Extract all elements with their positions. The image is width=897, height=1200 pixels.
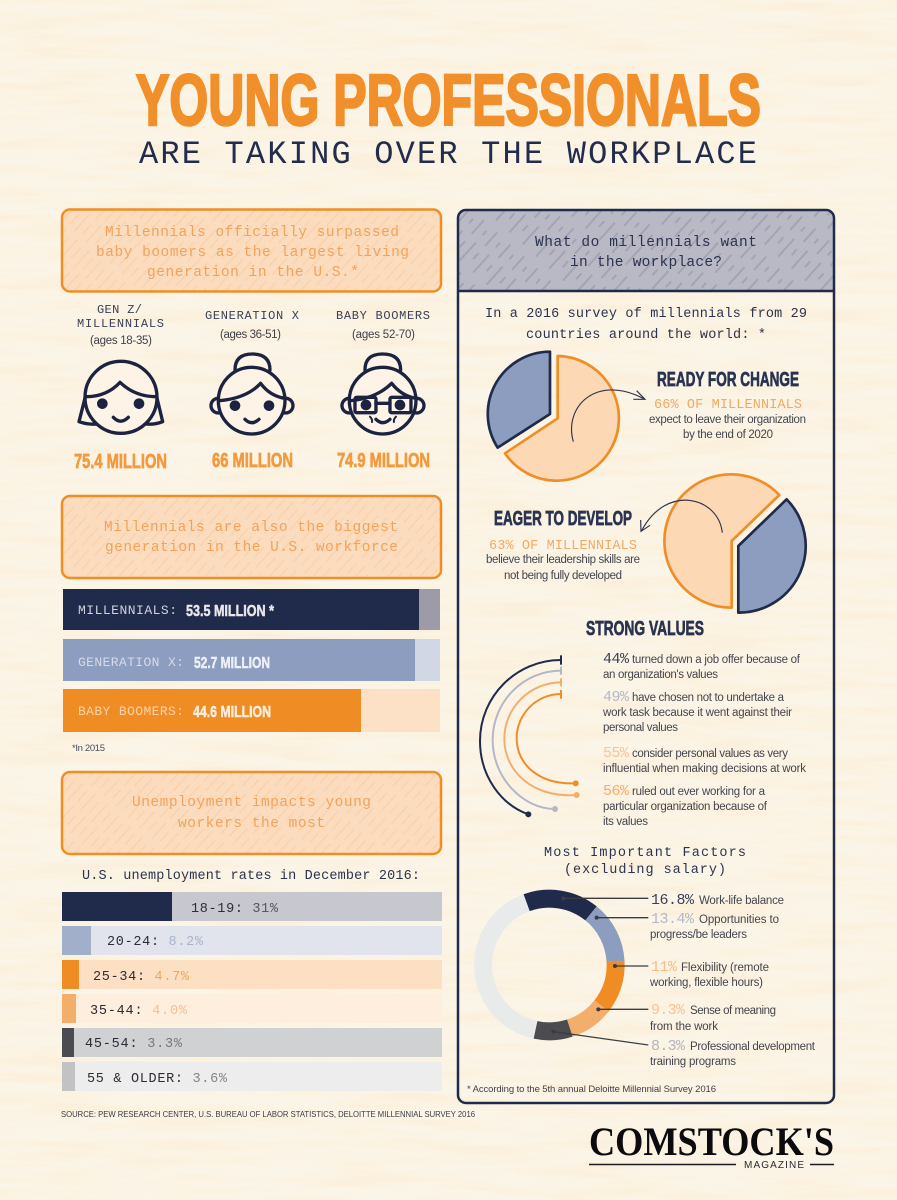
callout: unemployment: Unemployment impacts young	[132, 795, 371, 811]
stat: 55 percent	[603, 745, 806, 775]
stat: 56 percent: 56%	[603, 783, 630, 800]
stat: 49 percent	[602, 689, 792, 734]
label: opportunities	[650, 911, 779, 941]
label: opportunities: Opportunities to	[699, 914, 779, 926]
text: eager to develop: not being fully developed	[504, 570, 622, 582]
bar chart: unemployment: 45-54: 3.3%	[85, 1037, 183, 1052]
bar: millennials: 53.5 MILLION *	[186, 603, 275, 620]
footnote: survey: * According to the 5th annual Deloitte Millennial Survey 2016	[467, 1084, 716, 1095]
generation labels: (ages 52-70)	[352, 329, 415, 341]
generation labels: GENERATION X	[205, 309, 299, 323]
label: opportunities: 13.4%	[651, 911, 695, 928]
icon: gen x face	[211, 354, 293, 434]
label: sense of meaning: from the work	[650, 1021, 718, 1033]
label: work-life balance: Work-life balance	[699, 895, 784, 907]
bar chart: unemployment: 35-44: 4.0%	[90, 1004, 188, 1019]
stat: 49 percent: work task because it went against their	[602, 707, 792, 719]
stat: 55 percent: consider personal values as very	[632, 748, 788, 760]
stat: 55 percent: 55%	[603, 745, 630, 762]
label: flexibility: 11%	[651, 959, 678, 976]
heading: most important factors: Most Important Factors	[544, 846, 746, 861]
donut chart: factors	[483, 897, 648, 1045]
text: eager to develop: EAGER TO DEVELOP	[494, 508, 632, 530]
text: ready for change: expect to leave their organization	[649, 414, 806, 426]
label: professional development	[650, 1038, 816, 1068]
callout: largest living generation: Millennials officially surpassed	[105, 225, 399, 241]
bar: generation x: GENERATION X:	[78, 655, 184, 670]
icon: gen z face	[79, 361, 163, 433]
generation labels	[77, 303, 430, 347]
panel: what millennials want	[458, 210, 834, 1103]
title	[136, 61, 761, 173]
logo: comstock's magazine: MAGAZINE	[744, 1160, 804, 1171]
label: professional development: training programs	[650, 1056, 736, 1068]
panel header	[458, 210, 834, 291]
bar: baby boomers	[63, 689, 440, 732]
label: sense of meaning	[650, 1002, 776, 1033]
bar: millennials	[63, 589, 440, 630]
heading: most important factors: (excluding salary)	[564, 863, 726, 878]
text: ready for change: READY FOR CHANGE	[657, 369, 799, 391]
stat: 44 percent: an organization's values	[603, 669, 718, 681]
text: ready for change: by the end of 2020	[683, 429, 773, 441]
panel header: What do millennials want	[535, 235, 757, 251]
label: work-life balance	[651, 892, 784, 909]
stat: 49 percent: 49%	[603, 689, 630, 706]
stat: 56 percent: ruled out ever working for a	[632, 786, 766, 798]
label: flexibility	[649, 959, 769, 989]
bar: baby boomers: 44.6 MILLION	[193, 704, 271, 721]
stat: 56 percent: its values	[603, 816, 648, 828]
bar chart: unemployment: 55 & OLDER: 3.6%	[87, 1072, 228, 1087]
heading: unemployment rates: U.S. unemployment rates in December 2016:	[82, 869, 420, 884]
heading: most important factors	[544, 846, 746, 878]
callout: biggest generation in workforce: generation in the U.S. workforce	[105, 540, 398, 556]
label: flexibility: Flexibility (remote	[681, 962, 769, 974]
label: professional development: 8.3%	[651, 1038, 686, 1055]
title: ARE TAKING OVER THE WORKPLACE	[139, 136, 757, 173]
stat: 49 percent: have chosen not to undertake a	[632, 692, 785, 704]
bar chart: unemployment: 18-19: 31%	[191, 902, 279, 917]
footnote: *In 2015	[72, 743, 105, 754]
text: ready for change	[649, 369, 806, 441]
population numbers: 75.4 MILLION	[74, 451, 167, 473]
text: ready for change: 66% OF MILLENNIALS	[654, 398, 802, 413]
pie chart: eager to develop	[664, 474, 806, 613]
stat: 44 percent	[603, 651, 801, 681]
source line: SOURCE: PEW RESEARCH CENTER, U.S. BUREAU OF LABOR STATISTICS, DELOITTE MILLENNIAL SURVEY 2016	[61, 1109, 475, 1119]
logo: comstock's magazine: COMSTOCK'S	[589, 1119, 834, 1164]
population numbers	[74, 450, 430, 473]
stat: 56 percent: particular organization because of	[603, 801, 768, 813]
label: sense of meaning: Sense of meaning	[690, 1005, 776, 1017]
bar: generation x: 52.7 MILLION	[194, 655, 270, 672]
stat: 56 percent	[603, 783, 768, 828]
pie chart: ready for change	[488, 352, 619, 481]
bar chart: unemployment	[62, 892, 442, 1091]
stat: 55 percent: influential when making decisions at work	[603, 763, 806, 775]
stat: 44 percent: turned down a job offer because of	[632, 654, 801, 666]
bar chart: unemployment: 25-34: 4.7%	[93, 970, 190, 985]
generation labels: BABY BOOMERS	[336, 309, 430, 323]
survey intro	[485, 307, 807, 343]
label: opportunities: progress/be leaders	[650, 929, 747, 941]
callout: biggest generation in workforce: Millennials are also the biggest	[104, 520, 398, 536]
bar chart: unemployment: 20-24: 8.2%	[107, 935, 204, 950]
generation labels: (ages 18-35)	[90, 335, 152, 347]
panel header: in the workplace?	[570, 255, 722, 271]
arrow: ready for change	[572, 390, 645, 442]
generation labels: (ages 36-51)	[220, 329, 281, 341]
radial arcs: strong values	[480, 655, 580, 817]
callout: unemployment	[62, 772, 441, 854]
text: eager to develop: 63% OF MILLENNIALS	[489, 539, 637, 554]
label: flexibility: working, flexible hours)	[649, 977, 763, 989]
survey intro: countries around the world: *	[526, 328, 766, 343]
label: sense of meaning: 9.3%	[651, 1002, 686, 1019]
bar: millennials: MILLENNIALS:	[78, 603, 177, 618]
text: eager to develop: believe their leadership skills are	[486, 554, 640, 566]
bar: generation x	[63, 639, 440, 681]
bar: baby boomers: BABY BOOMERS:	[78, 704, 184, 719]
text: eager to develop	[486, 508, 640, 582]
icon: baby boomer face	[342, 354, 424, 434]
callout: largest living generation: baby boomers as the largest living	[96, 245, 409, 261]
generation labels: GEN Z/	[97, 303, 142, 317]
bar chart: workforce	[63, 589, 440, 754]
label: work-life balance: 16.8%	[651, 892, 695, 909]
callout: unemployment: workers the most	[178, 816, 325, 832]
label: professional development: Professional development	[690, 1041, 816, 1053]
callout: biggest generation in workforce	[62, 496, 441, 578]
callout: largest living generation	[62, 210, 441, 292]
survey intro: In a 2016 survey of millennials from 29	[485, 307, 807, 322]
stat: 49 percent: personal values	[603, 722, 678, 734]
heading: strong values: STRONG VALUES	[586, 618, 704, 640]
callout: largest living generation: generation in the U.S.*	[147, 265, 359, 281]
population numbers: 74.9 MILLION	[337, 450, 430, 472]
generation labels: MILLENNIALS	[77, 317, 164, 331]
population numbers: 66 MILLION	[212, 450, 293, 472]
stat: 44 percent: 44%	[603, 651, 630, 668]
arrow: eager to develop	[641, 500, 722, 533]
